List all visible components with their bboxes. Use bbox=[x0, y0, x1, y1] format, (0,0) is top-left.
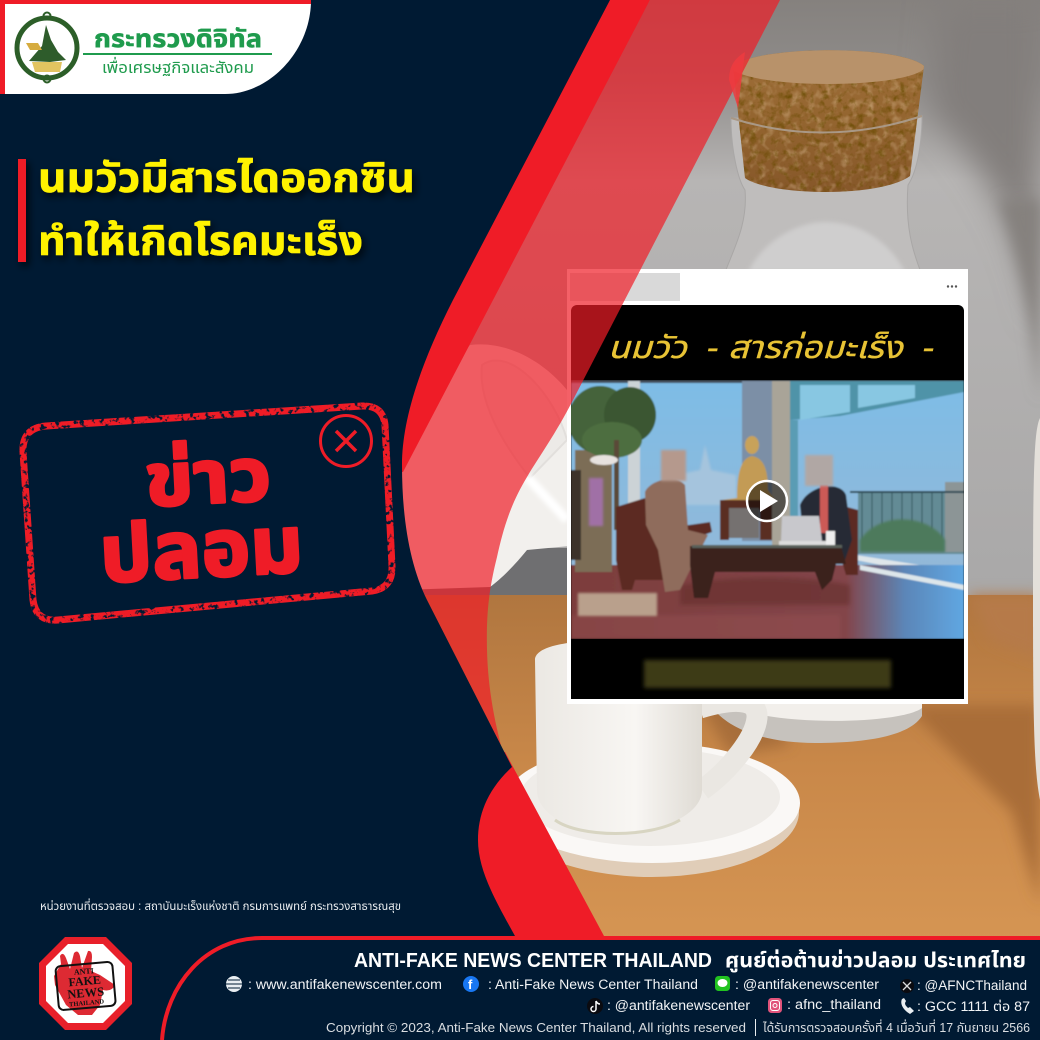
small red highlight on cork bbox=[729, 52, 745, 108]
icon: red hand bbox=[54, 951, 115, 1015]
stamp label bbox=[55, 962, 116, 1010]
blurred account name bbox=[570, 273, 680, 301]
stamp word 1: ข่าว bbox=[143, 433, 273, 522]
facebook handle: : Anti-Fake News Center Thailand bbox=[488, 977, 698, 992]
right chair bbox=[840, 505, 858, 575]
translucent red diagonal band bbox=[400, 0, 780, 760]
icon: tiktok bbox=[587, 998, 603, 1014]
laptop bbox=[779, 516, 835, 545]
video title caption: นมวัว - สารก่อมะเร็ง - bbox=[608, 330, 934, 365]
icon: facebook bbox=[463, 976, 479, 992]
headline bbox=[18, 155, 415, 264]
icon: website globe bbox=[226, 976, 242, 992]
stamp label: NEWS bbox=[67, 984, 105, 1002]
navy panel bbox=[0, 0, 610, 936]
line handle: : @antifakenewscenter bbox=[735, 977, 880, 992]
solid red diagonal band bbox=[380, 0, 650, 472]
icon: facebook: f bbox=[468, 977, 473, 992]
cup bbox=[535, 640, 757, 834]
left chair bbox=[616, 498, 712, 590]
coffee table bbox=[690, 546, 846, 598]
ministry name: กระทรวงดิจิทัล bbox=[94, 25, 262, 53]
balcony railing and view bbox=[849, 482, 964, 566]
floor bbox=[571, 565, 964, 639]
bowl behind the cup bbox=[716, 700, 922, 743]
x handle: : @AFNCThailand bbox=[917, 978, 1027, 993]
play button bbox=[747, 481, 787, 521]
stamp label: THAILAND bbox=[69, 998, 105, 1008]
host in robe bbox=[645, 450, 708, 592]
carafe rim bbox=[731, 116, 922, 133]
stamp frame bbox=[23, 406, 392, 620]
ministry tagline: เพื่อเศรษฐกิจและสังคม bbox=[102, 56, 254, 77]
headline line 2: ทำให้เกิดโรคมะเร็ง bbox=[38, 218, 363, 264]
stamp label: FAKE bbox=[68, 973, 101, 989]
cork stopper bbox=[736, 50, 924, 192]
video thumbnail bbox=[568, 305, 964, 699]
guest in suit bbox=[800, 455, 852, 560]
blurred name tag bbox=[578, 593, 657, 616]
verification source note: หน่วยงานที่ตรวจสอบ : สถาบันมะเร็งแห่งชาติ กรมการแพทย์ กระทรวงสาธารณสุข bbox=[40, 898, 401, 913]
anti fake news badge bbox=[39, 937, 132, 1030]
icon: instagram bbox=[768, 998, 782, 1013]
facebook post card bbox=[567, 269, 968, 704]
stamp word 2: ปลอม bbox=[98, 500, 305, 599]
more options dots bbox=[947, 285, 957, 288]
tiktok handle: : @antifakenewscenter bbox=[607, 998, 751, 1013]
carafe glass bbox=[724, 116, 922, 275]
instagram handle: : afnc_thailand bbox=[787, 997, 881, 1012]
icon: line bbox=[715, 976, 730, 991]
blurred subtitle bbox=[644, 660, 891, 688]
icon: x bbox=[900, 979, 914, 993]
copyright: Copyright © 2023, Anti-Fake News Center Thailand, All rights reserved bbox=[326, 1021, 746, 1035]
pitcher bbox=[400, 344, 580, 590]
background photo: carafe, pitcher and cup on table bbox=[400, 0, 1040, 940]
buddha statue bbox=[720, 436, 775, 540]
x mark circle bbox=[320, 416, 372, 466]
icon: phone bbox=[901, 998, 914, 1014]
footer bar bbox=[162, 938, 1040, 1040]
ministry logo panel bbox=[0, 0, 311, 94]
studio scene bbox=[568, 380, 964, 639]
fake news stamp bbox=[23, 406, 392, 620]
website: : www.antifakenewscenter.com bbox=[248, 977, 442, 992]
plant and tree trunk bbox=[568, 386, 656, 572]
verification date: ได้รับการตรวจสอบครั้งที่ 4 เมื่อวันที่ 17 กันยายน 2566 bbox=[762, 1019, 1030, 1035]
footer title latin: ANTI-FAKE NEWS CENTER THAILAND bbox=[354, 949, 712, 972]
white jar at right edge bbox=[1033, 418, 1040, 800]
ministry seal bbox=[17, 12, 77, 82]
solid red lower blob bbox=[450, 752, 604, 936]
footer title thai: ศูนย์ต่อต้านข่าวปลอม ประเทศไทย bbox=[725, 949, 1026, 973]
headline line 1: นมวัวมีสารไดออกซิน bbox=[38, 155, 415, 201]
stamp label: ANTI bbox=[73, 966, 94, 977]
hotline: : GCC 1111 ต่อ 87 bbox=[917, 998, 1030, 1014]
saucer bbox=[504, 743, 800, 877]
